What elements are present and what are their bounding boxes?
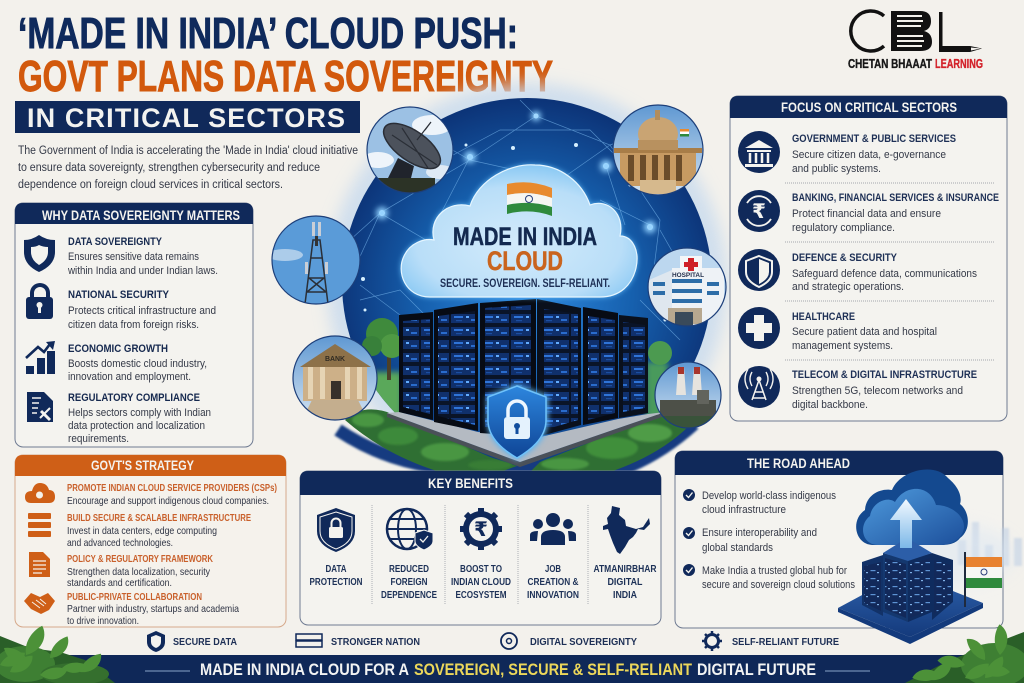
panel: key benefits: KEY BENEFITS: [428, 476, 513, 491]
labels: BOOST TO: [460, 564, 502, 575]
lower rim band: [338, 424, 694, 470]
intro text: to ensure data sovereignty, strengthen cybersecurity and reduce: [18, 162, 320, 174]
item: national security: Protects critical infrastructure and: [68, 305, 216, 317]
item: data sovereignty: [67, 236, 218, 277]
item: infrastructure: Invest in data centers, edge computing: [67, 526, 217, 537]
illustration: cloud upload to data centre: [838, 469, 1022, 644]
central illustration: made in india cloud globe: [267, 83, 727, 483]
item: defence: [792, 252, 977, 293]
bullet: interoperability: [683, 527, 817, 554]
panel: focus on critical sectors: FOCUS ON CRITICAL SECTORS: [781, 100, 957, 115]
title: [15, 9, 553, 133]
item: promote CSPs: [67, 483, 277, 507]
icon: shield: [24, 235, 55, 272]
strip: secure data: SECURE DATA: [173, 636, 237, 648]
labels: INNOVATION: [527, 590, 579, 601]
item: economic growth: [68, 343, 207, 383]
labels: [310, 564, 657, 601]
item: telecom: digital backbone.: [792, 399, 868, 411]
photo: telecom tower: [267, 216, 360, 304]
strip: stronger nation: STRONGER NATION: [331, 636, 420, 648]
item: defence: DEFENCE & SECURITY: [792, 252, 898, 264]
icon: growth chart: [26, 341, 55, 374]
labels: INDIAN CLOUD: [451, 577, 511, 588]
panel: key benefits: [300, 471, 661, 625]
panel: govt's strategy: GOVT'S STRATEGY: [91, 458, 194, 473]
item: policy: [67, 554, 214, 589]
intro text: The Government of India is accelerating the 'Made in India' cloud initiative: [18, 145, 358, 157]
icon: compliance document: [27, 392, 53, 422]
servers: [399, 299, 648, 437]
labels: DATA: [326, 564, 346, 575]
bullet: world-class infrastructure: cloud infrastructure: [702, 504, 786, 516]
item: economic growth: ECONOMIC GROWTH: [68, 343, 168, 355]
item: regulatory compliance: Helps sectors comply with Indian: [68, 407, 211, 419]
item: banking: Protect financial data and ensure: [792, 208, 941, 220]
icon: medical cross: [738, 307, 780, 349]
icon: indian flag: [507, 182, 552, 216]
panel: govt's strategy: [15, 455, 286, 627]
icon: people: [530, 513, 576, 545]
photo: hospital: HOSPITAL: [672, 272, 704, 279]
item: healthcare: HEALTHCARE: [792, 311, 855, 323]
panel: why data sovereignty matters: WHY DATA SOVEREIGNTY MATTERS: [42, 208, 240, 223]
item: government: Secure citizen data, e-governance: [792, 149, 946, 161]
item: government: [792, 133, 956, 175]
item: healthcare: management systems.: [792, 340, 893, 352]
item: collaboration: to drive innovation.: [67, 616, 139, 627]
icon: globe with shield: [387, 509, 433, 550]
security shield: [487, 384, 548, 460]
photo: parliament building: [613, 105, 703, 195]
item: national security: NATIONAL SECURITY: [68, 289, 170, 301]
title: IN CRITICAL SECTORS: [27, 103, 345, 133]
photo: satellite dish: [368, 108, 452, 192]
labels: JOB: [545, 564, 561, 575]
item: data sovereignty: Ensures sensitive data remains: [68, 251, 199, 263]
bottom banner: [0, 655, 1024, 683]
intro text: dependence on foreign cloud services in critical sectors.: [18, 179, 283, 191]
item: healthcare: [792, 311, 937, 352]
bullet: world-class infrastructure: [683, 489, 836, 516]
item: telecom: Strengthen 5G, telecom networks and: [792, 385, 963, 397]
item: healthcare: Secure patient data and hospital: [792, 326, 937, 338]
item: policy: Strengthen data localization, security: [67, 567, 211, 578]
intro text: [18, 145, 358, 191]
strip: digital sovereignty: [501, 633, 637, 649]
panel: why data sovereignty matters: [15, 203, 253, 447]
item: banking: [792, 192, 999, 234]
item: infrastructure: [67, 513, 251, 549]
platform: [387, 412, 665, 467]
bottom banner: SOVEREIGN, SECURE & SELF-RELIANT: [414, 661, 692, 679]
item: collaboration: [67, 592, 239, 627]
bottom banner: DIGITAL FUTURE: [697, 661, 816, 679]
cloud: [401, 165, 637, 297]
icon: padlock: [26, 283, 53, 319]
bullet: world-class infrastructure: Develop world-class indigenous: [702, 490, 836, 502]
icon: data protection: [317, 508, 355, 552]
item: government: and public systems.: [792, 163, 881, 175]
item: national security: citizen data from foreign risks.: [68, 319, 199, 331]
item: infrastructure: and advanced technologies.: [67, 538, 173, 549]
labels: FOREIGN: [390, 577, 428, 588]
photo: bank: [293, 336, 377, 420]
title: GOVT PLANS DATA SOVEREIGNTY: [18, 52, 553, 101]
labels: PROTECTION: [310, 577, 362, 588]
item: regulatory compliance: [68, 392, 211, 445]
bullet: interoperability: Ensure interoperability and: [702, 527, 817, 539]
item: data sovereignty: DATA SOVEREIGNTY: [68, 236, 163, 248]
greenery around platform: [345, 409, 690, 472]
icon: rupee gear: [460, 508, 502, 550]
item: promote CSPs: Encourage and support indigenous cloud companies.: [67, 496, 269, 507]
logo: Chetan Bhaaat Learning: CHETAN BHAAAT: [848, 56, 932, 71]
item: telecom: [792, 369, 977, 411]
icon: india map: [603, 506, 650, 554]
labels: DEPENDENCE: [381, 590, 437, 601]
icon: server stack: [28, 513, 51, 537]
labels: REDUCED: [389, 564, 429, 575]
photo rims: [272, 105, 726, 428]
panel: focus on critical sectors: [730, 96, 1007, 421]
item: promote CSPs: PROMOTE INDIAN CLOUD SERVICE PROVIDERS (CSPs): [67, 483, 277, 494]
photo: power plant: [655, 362, 721, 428]
bullet: global hub: Make India a trusted global hub for: [702, 565, 847, 577]
foliage: left corner: [0, 625, 115, 683]
lawn and trees: [362, 318, 672, 418]
bottom banner: MADE IN INDIA CLOUD FOR A: [200, 661, 409, 679]
labels: ECOSYSTEM: [456, 590, 506, 601]
item: data sovereignty: within India and under Indian laws.: [67, 265, 218, 277]
labels: INDIA: [613, 590, 637, 601]
cloud: SECURE. SOVEREIGN. SELF-RELIANT.: [440, 276, 610, 290]
strip: self-reliant future: [702, 631, 839, 651]
foliage: right corner: [905, 624, 1024, 683]
item: economic growth: Boosts domestic cloud industry,: [68, 358, 207, 370]
item: collaboration: PUBLIC-PRIVATE COLLABORATION: [67, 592, 202, 603]
title: ‘MADE IN INDIA’ CLOUD PUSH:: [18, 9, 518, 58]
logo: Chetan Bhaaat Learning: LEARNING: [935, 56, 983, 71]
photo: hospital: [648, 248, 726, 326]
item: regulatory compliance: requirements.: [68, 433, 129, 445]
item: regulatory compliance: REGULATORY COMPLIANCE: [68, 392, 200, 404]
icon: telecom mast: [738, 366, 780, 408]
panel: the road ahead: THE ROAD AHEAD: [747, 456, 850, 471]
cloud: CLOUD: [487, 246, 563, 276]
strip: digital sovereignty: DIGITAL SOVEREIGNTY: [530, 636, 637, 648]
icon: rupee: [738, 190, 780, 232]
item: government: GOVERNMENT & PUBLIC SERVICES: [792, 133, 956, 145]
cloud: MADE IN INDIA: [453, 223, 597, 251]
bullet: global hub: [683, 564, 855, 591]
network constellation: [340, 100, 700, 340]
photo: bank: BANK: [325, 356, 345, 363]
item: defence: and strategic operations.: [792, 281, 904, 293]
item: policy: POLICY & REGULATORY FRAMEWORK: [67, 554, 214, 565]
item: economic growth: innovation and employment.: [68, 371, 191, 383]
icon: rupee gear: ₹: [474, 517, 488, 541]
item: banking: regulatory compliance.: [792, 222, 895, 234]
icon: flag on pole: [964, 552, 1002, 607]
labels: CREATION &: [528, 577, 578, 588]
strip: secure data: [147, 631, 237, 652]
bullet: interoperability: global standards: [702, 542, 773, 554]
icon: defence shield: [738, 249, 780, 291]
icon: cloud gear: [25, 483, 55, 503]
item: policy: standards and certification.: [67, 578, 172, 589]
panel: the road ahead: [675, 451, 1003, 628]
item: collaboration: Partner with industry, startups and academia: [67, 604, 239, 615]
icon: handshake: [24, 593, 55, 614]
icon: government building: [738, 131, 780, 173]
icon: rupee: ₹: [752, 199, 766, 223]
item: defence: Safeguard defence data, communications: [792, 268, 977, 280]
logo: Chetan Bhaaat Learning: [848, 11, 983, 71]
item: infrastructure: BUILD SECURE & SCALABLE INFRASTRUCTURE: [67, 513, 251, 524]
strip: stronger nation: [296, 634, 420, 648]
item: telecom: TELECOM & DIGITAL INFRASTRUCTURE: [792, 369, 977, 381]
labels: ATMANIRBHAR: [594, 564, 657, 575]
bullet: global hub: secure and sovereign cloud solutions: [702, 579, 855, 591]
item: regulatory compliance: data protection and localization: [68, 420, 205, 432]
item: national security: [68, 289, 216, 331]
strip: self-reliant future: SELF-RELIANT FUTURE: [732, 636, 839, 648]
labels: DIGITAL: [608, 577, 642, 588]
icon: policy document: [29, 552, 50, 577]
